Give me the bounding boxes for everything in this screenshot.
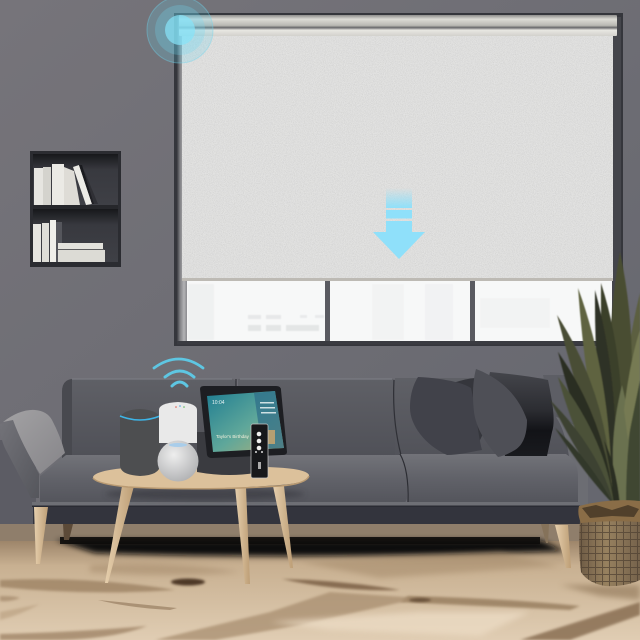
seat front lip <box>32 502 580 506</box>
smart speaker white <box>159 402 197 443</box>
remote control <box>251 424 268 478</box>
books upper row <box>34 164 98 205</box>
sofa <box>0 369 588 524</box>
sofa base <box>33 505 580 524</box>
roller blind fabric <box>182 33 613 281</box>
table legs <box>105 486 134 583</box>
wall shade under arm <box>0 440 36 524</box>
sofa back cushions <box>62 379 236 460</box>
sofa right arm <box>543 375 586 500</box>
sofa left arm <box>0 420 39 498</box>
coffee table <box>93 467 309 584</box>
smart display <box>197 386 287 475</box>
screen clock: 10:04 <box>212 400 225 406</box>
plant leaves <box>550 252 640 505</box>
pillows <box>410 369 554 457</box>
sofa back legs <box>63 524 549 543</box>
round speaker <box>158 440 198 482</box>
potted plant <box>550 252 640 586</box>
sofa front legs <box>34 507 571 568</box>
woven pot <box>578 500 640 586</box>
icon: wifi signal <box>154 359 203 386</box>
window <box>174 13 623 346</box>
books lower row <box>33 220 105 262</box>
blind bottom bar <box>182 278 613 281</box>
screen caption: Taylor's Birthday <box>216 434 250 439</box>
icon: wireless signal rings at motor <box>147 0 213 63</box>
headrail <box>179 15 617 36</box>
wooden floor and baseboard <box>0 524 640 640</box>
window glass with city view <box>177 280 621 344</box>
table shadow on sofa <box>105 488 305 500</box>
smart devices on table <box>120 359 287 482</box>
tabletop <box>93 467 309 489</box>
icon: down arrow on blind <box>373 188 425 259</box>
sofa seat cushions <box>40 455 407 503</box>
wall shelf with books <box>30 151 121 267</box>
smart speaker cylinder <box>120 409 160 476</box>
